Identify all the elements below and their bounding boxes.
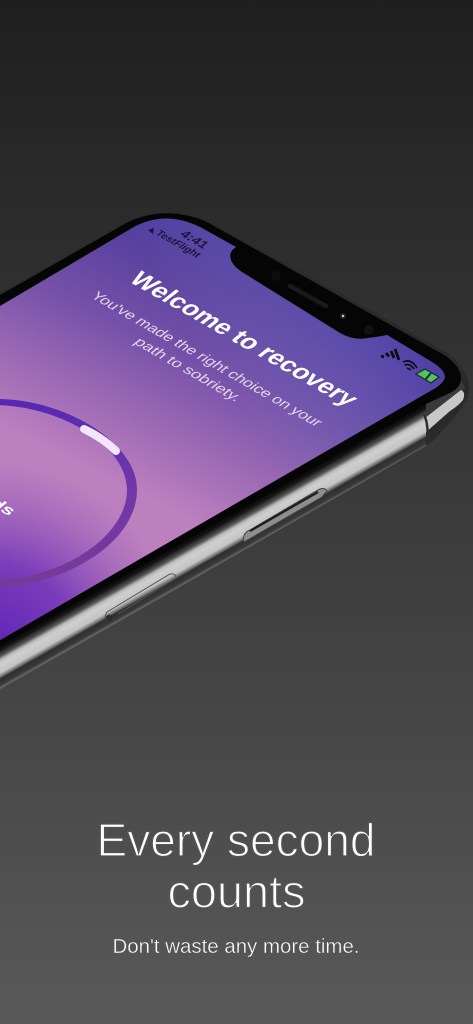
phone	[0, 200, 473, 696]
subtext line 2: path to sobriety.	[130, 335, 245, 404]
volume button groove	[250, 492, 318, 531]
phone outer frame	[0, 211, 469, 690]
steel corner	[425, 390, 464, 433]
steel side band	[0, 404, 426, 696]
wifi icon	[403, 361, 417, 370]
volume button	[244, 488, 327, 542]
title line 1: Every second	[96, 814, 376, 866]
progress ring	[0, 399, 137, 587]
subtitle: Don't waste any more time.	[112, 936, 360, 958]
speaker	[290, 286, 326, 306]
camera	[340, 313, 346, 319]
heading: welcome: Welcome to recovery	[124, 267, 365, 411]
status time: 4:41	[177, 228, 213, 251]
subtext line 1: You've made the right choice on your	[87, 289, 326, 429]
status TestFlight: TestFlight	[153, 229, 204, 260]
front lens	[271, 271, 281, 281]
antenna line	[424, 414, 428, 441]
sensor	[364, 325, 374, 335]
side switch	[105, 574, 176, 621]
signal bars icon	[381, 349, 399, 360]
black bezel	[0, 213, 461, 654]
screen	[0, 218, 445, 640]
side switch screw	[106, 615, 112, 621]
status arrow icon	[148, 228, 154, 234]
ring progress handle	[84, 429, 116, 451]
corner lower bezel	[426, 380, 465, 417]
battery icon	[416, 369, 439, 383]
title line 2: counts	[168, 866, 306, 918]
